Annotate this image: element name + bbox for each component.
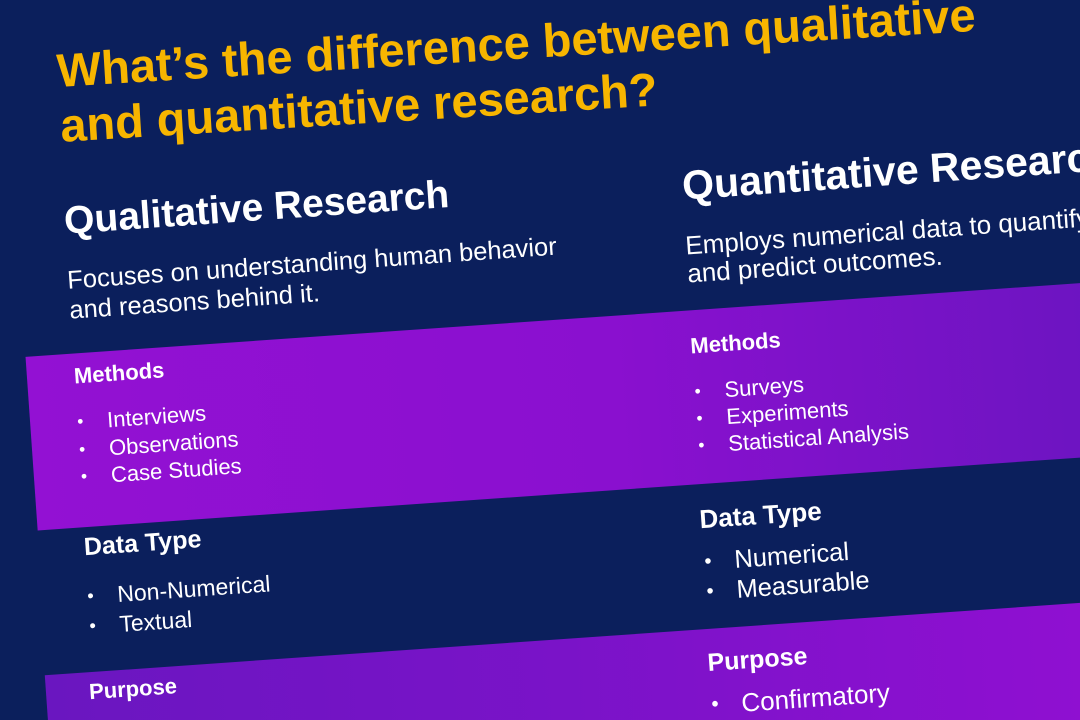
text: quantitative description: and predict outcomes. bbox=[686, 241, 944, 288]
heading: data type right: Data Type bbox=[698, 496, 823, 534]
list: qualitative data type: Non-Numerical bbox=[116, 570, 271, 607]
list: quantitative data type bbox=[705, 538, 870, 604]
title: and quantitative research? bbox=[59, 62, 659, 152]
heading: purpose right: Purpose bbox=[707, 642, 808, 677]
list: qualitative methods: Observations bbox=[108, 426, 239, 460]
list: quantitative methods bbox=[695, 372, 910, 456]
band: methods bbox=[26, 266, 1080, 530]
text: qualitative description bbox=[66, 233, 558, 325]
list: quantitative data type: Numerical bbox=[733, 538, 850, 574]
heading: methods left: Methods bbox=[73, 357, 165, 389]
heading: qualitative research: Qualitative Research bbox=[63, 173, 451, 243]
band: purpose bbox=[45, 585, 1080, 720]
text: quantitative description: Employs numerical data to quantify bbox=[684, 202, 1080, 261]
title bbox=[55, 0, 977, 152]
list: qualitative methods: Case Studies bbox=[110, 453, 242, 487]
list: quantitative methods: Statistical Analysis bbox=[727, 418, 910, 456]
heading: data type left: Data Type bbox=[83, 525, 202, 561]
list: quantitative purpose: Confirmatory bbox=[740, 677, 891, 718]
list: qualitative methods: Interviews bbox=[106, 400, 207, 432]
heading: methods right: Methods bbox=[690, 327, 781, 358]
list: quantitative data type: Measurable bbox=[736, 567, 870, 604]
list: qualitative data type bbox=[88, 570, 271, 637]
list: quantitative methods: Surveys bbox=[724, 372, 805, 402]
heading: purpose left: Purpose bbox=[88, 673, 178, 704]
text: quantitative description bbox=[684, 202, 1080, 288]
list: qualitative data type: Textual bbox=[118, 606, 193, 637]
text: qualitative description: and reasons behind it. bbox=[68, 279, 321, 325]
list: quantitative methods: Experiments bbox=[726, 396, 849, 429]
list: qualitative methods bbox=[78, 400, 242, 487]
text: qualitative description: Focuses on understanding human behavior bbox=[66, 233, 558, 295]
